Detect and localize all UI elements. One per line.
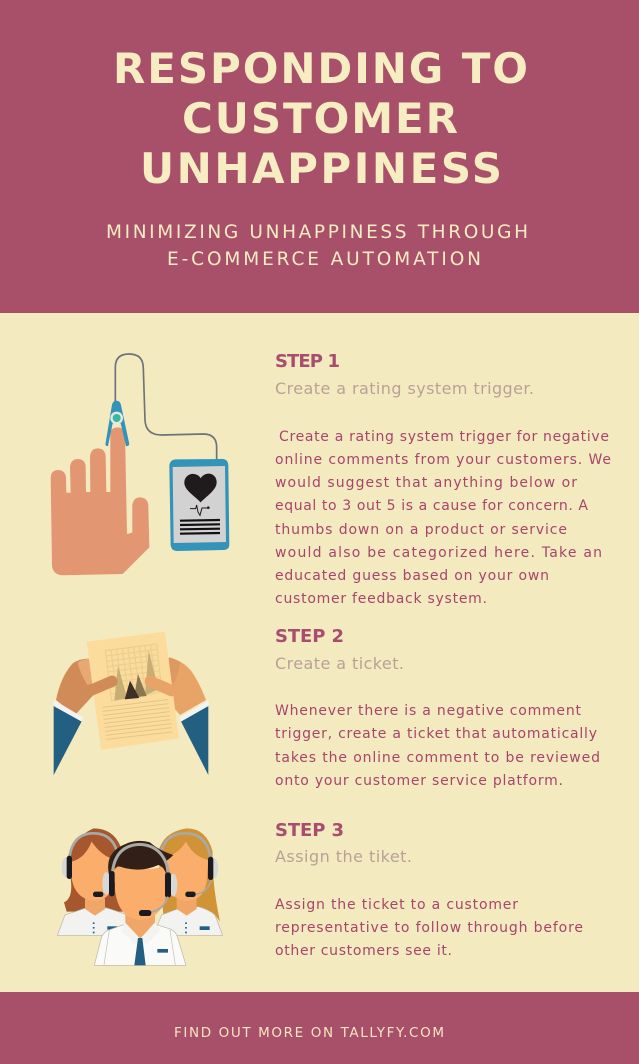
step 2 text: STEP 2 (275, 626, 344, 647)
step 1 text: customer feedback system. (275, 591, 487, 607)
step 1 text: educated guess based on your own (275, 568, 549, 584)
footer text: FIND OUT MORE ON TALLYFY.COM (174, 1025, 444, 1041)
step 1 text: online comments from your customers. We (275, 452, 611, 468)
icon: hand with pulse oximeter and tablet (51, 354, 229, 575)
tablet (169, 459, 229, 551)
step 1 text: equal to 3 out 5 is a cause for concern. A (275, 498, 588, 514)
document (87, 632, 179, 750)
step 2 text: takes the online comment to be reviewed (275, 750, 600, 766)
step 3 text: STEP 3 (275, 820, 344, 841)
step 3 text: Assign the tiket. (275, 847, 412, 866)
document text lines (102, 700, 172, 739)
icon: hands holding document (54, 632, 209, 775)
chart peaks (114, 666, 127, 701)
left agent (57, 828, 130, 935)
thumbs (90, 681, 112, 691)
step 3 text: other customers see it. (275, 943, 452, 959)
step 3 text: Assign the ticket to a customer (275, 897, 518, 913)
step 2 text: Create a ticket. (275, 654, 404, 673)
header panel (0, 0, 639, 313)
step 1 text (275, 351, 611, 607)
icon: three customer service agents (57, 828, 223, 965)
footer panel (0, 992, 639, 1064)
subtitle: MINIMIZING UNHAPPINESS THROUGH (106, 222, 528, 243)
step 3 text (275, 820, 583, 959)
title: RESPONDING TO (113, 44, 528, 93)
wire (115, 354, 217, 460)
step 2 text: Whenever there is a negative comment (275, 703, 582, 719)
step 1 text: would also be categorized here. Take an (275, 545, 602, 561)
step 2 text (275, 626, 600, 789)
step 2 text: onto your customer service platform. (275, 773, 563, 789)
step 1 text: Create a rating system trigger. (275, 379, 534, 398)
right agent (153, 828, 223, 935)
step 1 text: thumbs down on a product or service (275, 522, 567, 538)
title: CUSTOMER (182, 94, 458, 143)
subtitle: E-COMMERCE AUTOMATION (167, 249, 481, 270)
step 2 text: trigger, create a ticket that automatically (275, 726, 597, 742)
hand (51, 427, 149, 575)
subtitle (106, 222, 528, 270)
finger clip (105, 401, 129, 446)
right cuff and sleeve (181, 706, 208, 775)
left cuff and sleeve (54, 706, 82, 775)
step 1 text: would suggest that anything below or (275, 475, 577, 491)
step 1 text: Create a rating system trigger for negative (279, 429, 609, 445)
right hand (160, 657, 206, 715)
chart grid (105, 644, 162, 701)
step 3 text: representative to follow through before (275, 920, 583, 936)
title (113, 44, 528, 193)
step 1 text: STEP 1 (275, 351, 340, 372)
front agent (94, 841, 186, 965)
title: UNHAPPINESS (140, 144, 502, 193)
left hand (56, 659, 97, 715)
